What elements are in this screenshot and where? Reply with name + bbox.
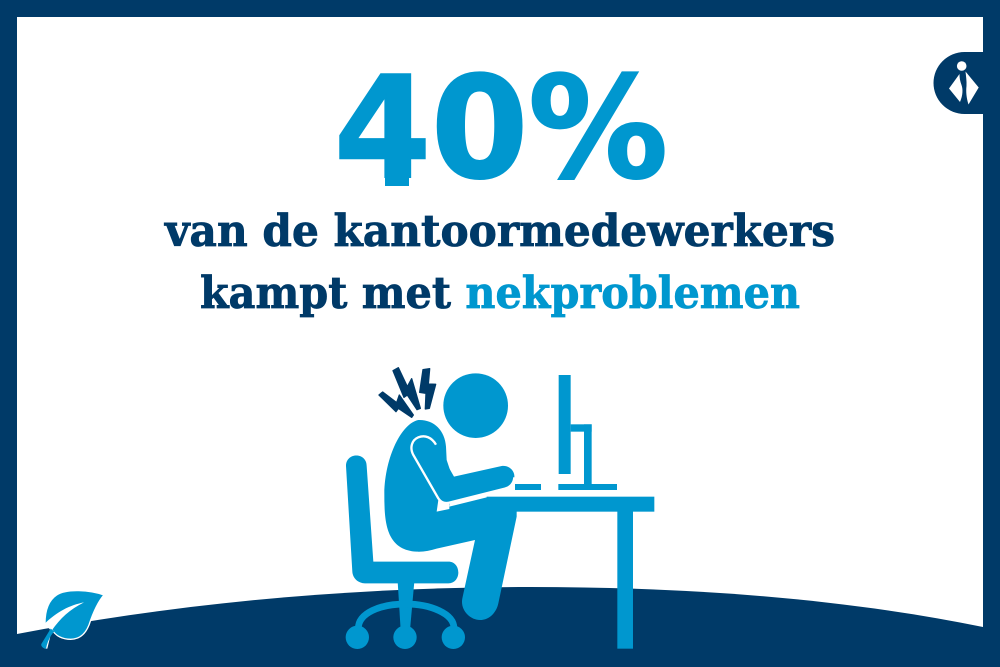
icon: person head [443, 373, 508, 438]
icon: desk [487, 497, 654, 649]
icon: computer monitor [558, 375, 617, 490]
icon: person body and leg [384, 420, 517, 620]
icon: pain lightning bolts [379, 368, 436, 417]
heading line 1: van de kantoormedewerkers [164, 206, 835, 257]
icon: keyboard [515, 484, 541, 490]
icon: leaf logo [41, 591, 104, 649]
big number: 40%: 40% [334, 47, 668, 211]
ground curve [17, 587, 983, 667]
heading line 2: kampt met nekproblemen [200, 268, 800, 319]
illustration: office worker with neck pain at desk [346, 368, 654, 649]
icon: brand logo badge [934, 52, 983, 114]
icon: person arm [411, 436, 514, 512]
icon: office chair [346, 455, 465, 649]
